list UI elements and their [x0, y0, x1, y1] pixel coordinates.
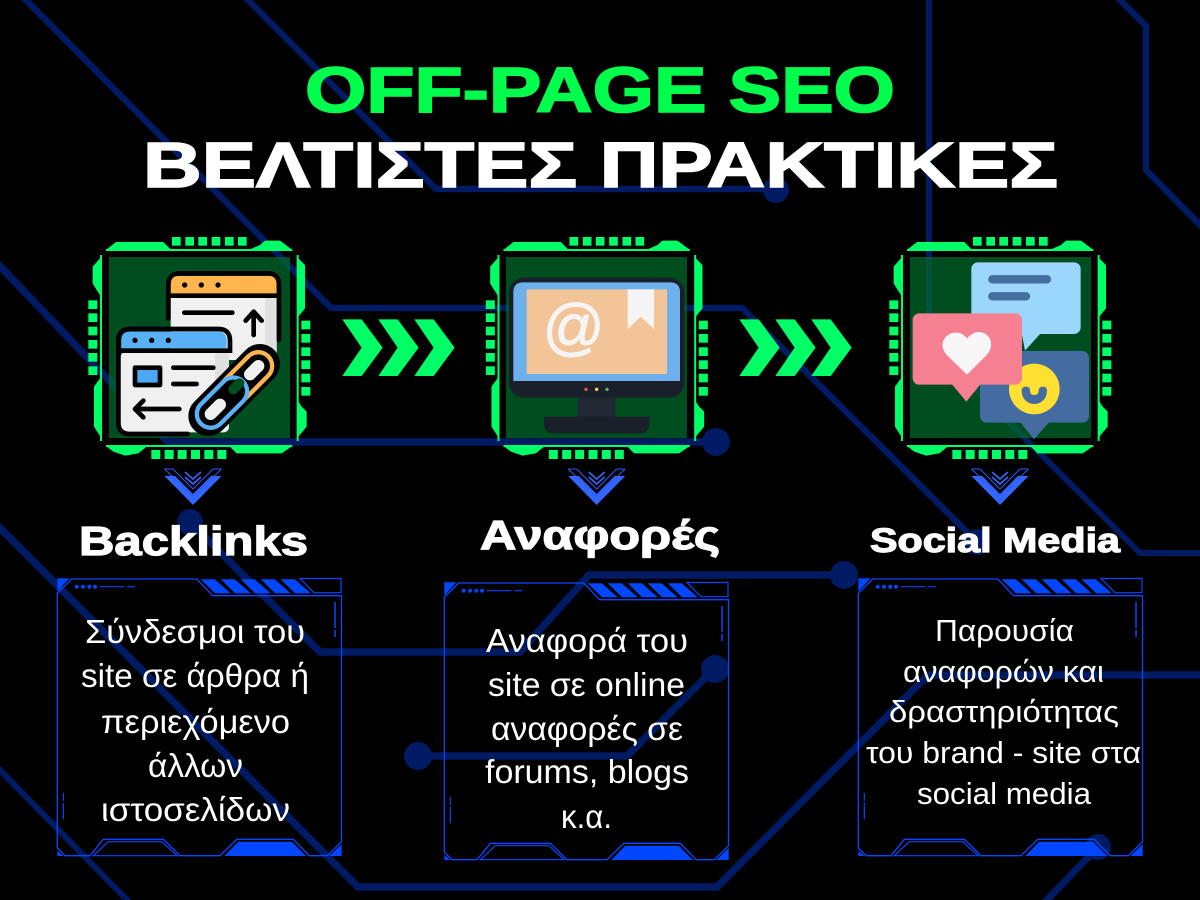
title line 2: ΒΕΛΤΙΣΤΕΣ ΠΡΑΚΤΙΚΕΣ [143, 129, 1058, 201]
icon: down arrow Αναφορές [568, 469, 625, 505]
description text: forums, blogs [485, 753, 689, 790]
card panel [910, 257, 1091, 438]
icon: down arrow Social Media [972, 469, 1028, 505]
description text: άλλων [148, 747, 243, 784]
description text: social media [917, 776, 1092, 811]
icon: chat bubbles [913, 262, 1089, 439]
arrow: chevrons to Social Media [739, 319, 852, 376]
card frame [88, 237, 310, 459]
heading: Αναφορές: Αναφορές [480, 512, 720, 558]
card frame [486, 237, 708, 459]
description text [866, 613, 1141, 811]
description text [81, 613, 309, 828]
heading: Backlinks: Backlinks [79, 518, 308, 564]
icon: monitor with email: @ [543, 293, 605, 363]
description text [485, 622, 689, 835]
description text: δραστηριότητας [889, 694, 1119, 729]
title [143, 54, 1058, 201]
box frame [57, 578, 342, 856]
description text: κ.α. [561, 798, 612, 835]
description text: αναφορών και [903, 654, 1104, 689]
description text: του brand - site στα [866, 735, 1141, 770]
description text: αναφορές σε [491, 710, 683, 747]
title line 1: OFF-PAGE SEO [305, 54, 895, 126]
card panel [109, 257, 290, 438]
description text: περιεχόμενο [101, 703, 290, 740]
icon: linked web pages [118, 273, 279, 434]
panel: Backlinks description [57, 578, 342, 856]
arrow: chevrons to Αναφορές [342, 319, 455, 376]
description text: ιστοσελίδων [101, 791, 290, 828]
icon: down arrow Backlinks [164, 469, 222, 505]
card frame [889, 237, 1111, 459]
card panel [506, 257, 687, 438]
card: Social Media icon [889, 237, 1111, 459]
card: Backlinks icon [88, 237, 310, 459]
description text: Αναφορά του [486, 622, 688, 659]
description text: site σε online [488, 666, 685, 703]
card: Αναφορές icon [486, 237, 708, 459]
description text: Παρουσία [935, 613, 1074, 648]
description text: site σε άρθρα ή [81, 657, 309, 694]
description text: Σύνδεσμοι του [85, 613, 305, 650]
box frame [858, 578, 1143, 856]
heading: Social Media: Social Media [870, 522, 1121, 560]
icon: monitor with email [509, 278, 684, 433]
panel: Αναφορές description [444, 582, 729, 860]
panel: Social Media description [858, 578, 1143, 856]
box frame [444, 582, 729, 860]
